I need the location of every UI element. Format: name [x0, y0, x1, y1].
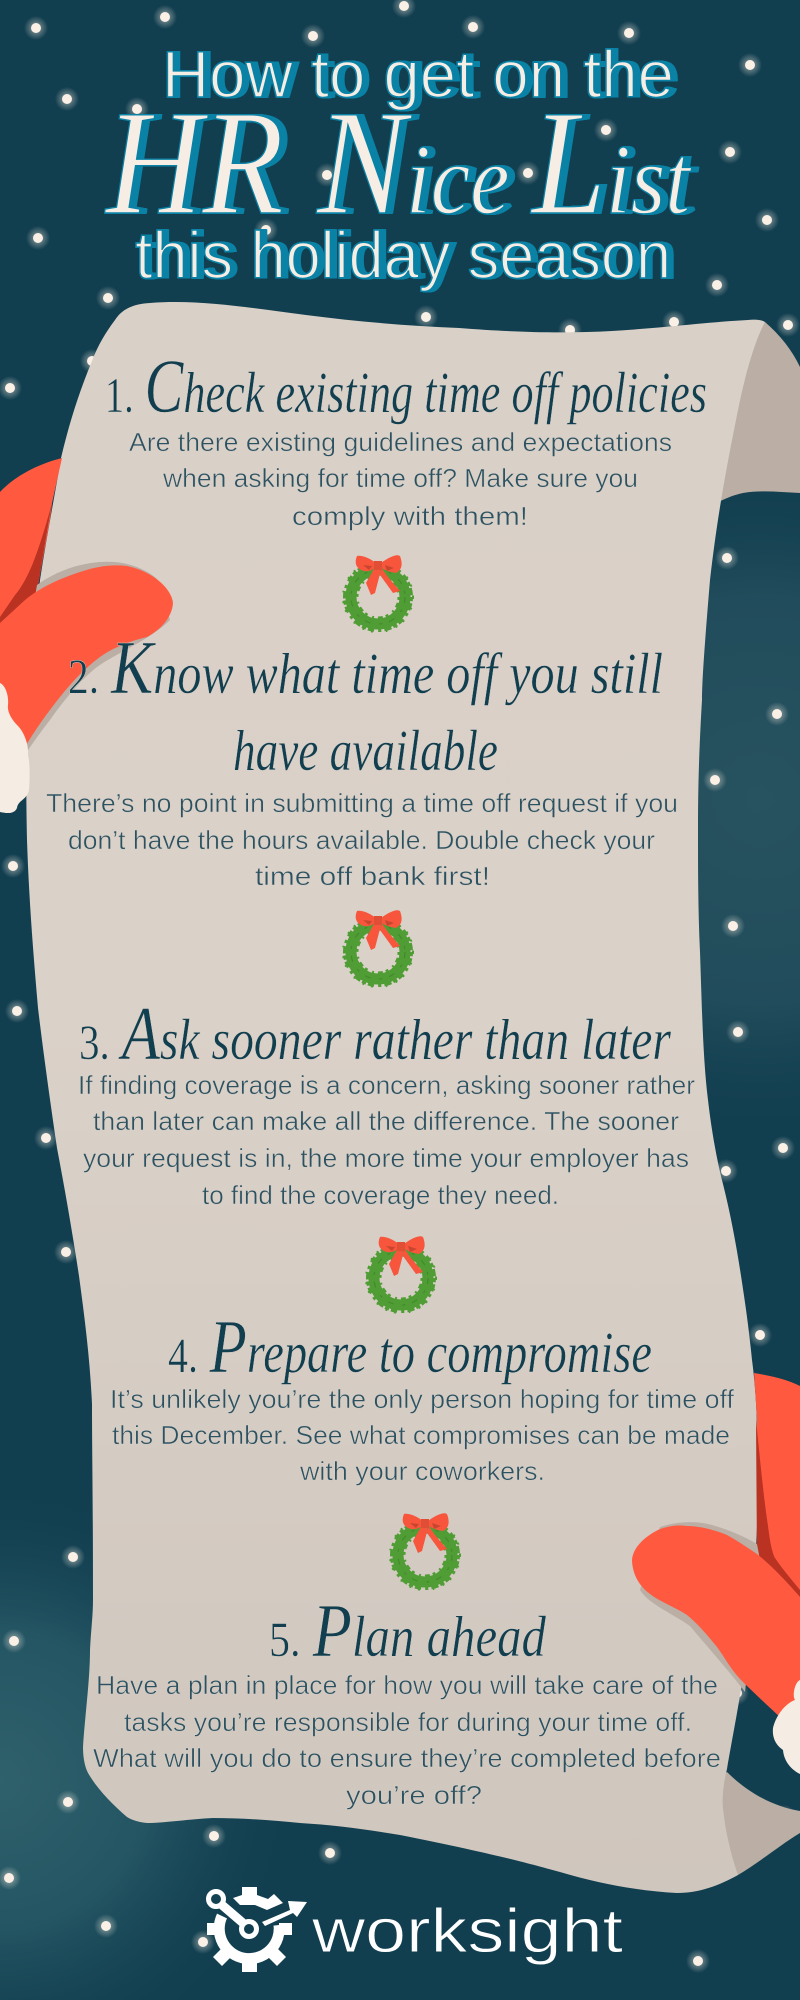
scroll: top back fold	[700, 322, 800, 502]
body text: Are there existing guidelines and expectations	[129, 427, 672, 457]
body text	[129, 427, 672, 531]
body text: comply with them!	[292, 501, 528, 531]
step 4	[110, 1305, 735, 1590]
left hat	[0, 458, 173, 813]
body text: What will you do to ensure they’re completed before	[93, 1743, 721, 1773]
icon: wreath	[390, 1513, 460, 1590]
hat: upper cone	[0, 458, 62, 640]
icon: wreath	[343, 555, 413, 632]
hat: mitten tip	[632, 1525, 800, 1719]
body text: Have a plan in place for how you will take care of the	[96, 1670, 718, 1700]
icon: wreath	[343, 910, 413, 987]
body text	[93, 1670, 721, 1810]
heading	[68, 626, 663, 783]
body text: time off bank first!	[255, 861, 490, 891]
icon: gear with arrow	[207, 1887, 307, 1972]
body text: If finding coverage is a concern, asking sooner rather	[78, 1070, 695, 1100]
body text: this December. See what compromises can be made	[112, 1420, 730, 1450]
wordmark: worksight	[311, 1897, 623, 1966]
title: HR Nice List	[104, 80, 692, 246]
heading: 3. Ask sooner rather than later	[79, 992, 671, 1076]
body text	[110, 1384, 735, 1486]
body text: when asking for time off? Make sure you	[162, 463, 638, 493]
hat: dark fold	[756, 1419, 800, 1605]
body text: than later can make all the difference. The sooner	[93, 1106, 679, 1136]
step 5	[93, 1589, 721, 1810]
step 3	[78, 992, 695, 1313]
body text: tasks you’re responsible for during your time off.	[124, 1707, 692, 1737]
heading: 4. Prepare to compromise	[168, 1305, 652, 1389]
body text: don’t have the hours available. Double check your	[68, 825, 655, 855]
body text: with your coworkers.	[299, 1456, 545, 1486]
body text: There’s no point in submitting a time off request if you	[46, 788, 678, 818]
title: this holiday season	[135, 218, 671, 292]
hat: shadow	[10, 562, 170, 750]
hat: mitten tip	[0, 565, 173, 747]
body text: you’re off?	[346, 1780, 482, 1810]
right hat	[632, 1373, 800, 1774]
scroll: paper	[26, 302, 765, 1893]
scroll: bottom back fold	[700, 1772, 800, 1875]
heading: have available	[233, 718, 498, 783]
logo: worksight	[207, 1887, 623, 1972]
title	[104, 37, 692, 292]
title: How to get on the	[162, 37, 674, 111]
body text: to find the coverage they need.	[202, 1180, 559, 1210]
body text	[78, 1070, 695, 1210]
step 1	[105, 345, 707, 632]
icon: wreath	[366, 1236, 436, 1313]
step 2	[46, 626, 678, 987]
body text: your request is in, the more time your employer has	[83, 1143, 689, 1173]
heading: 2. Know what time off you still	[68, 626, 663, 710]
heading: 5. Plan ahead	[269, 1589, 547, 1673]
hat: dark fold	[0, 503, 52, 650]
hat: upper cone	[754, 1373, 800, 1600]
hat: shadow	[640, 1522, 760, 1692]
body text: It’s unlikely you’re the only person hoping for time off	[110, 1384, 735, 1414]
body text	[46, 788, 678, 891]
hat: pompom	[773, 1680, 800, 1774]
hat: pompom	[0, 683, 30, 813]
